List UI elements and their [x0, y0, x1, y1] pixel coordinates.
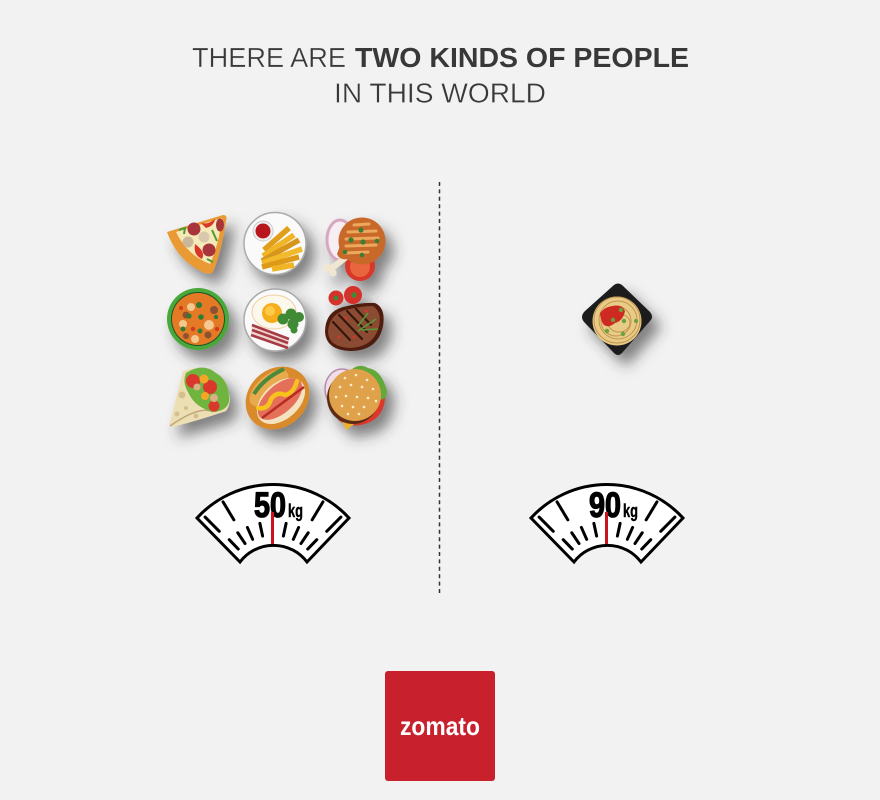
icon: steak with tomatoes	[325, 286, 384, 351]
icon: soup bowl	[167, 288, 229, 350]
title: IN THIS WORLD	[334, 78, 546, 108]
icon: grilled chicken	[323, 218, 386, 281]
gauge: 50 kg: kg	[288, 501, 303, 521]
gauge: 50 kg	[197, 485, 349, 562]
icon: fries plate	[244, 212, 306, 274]
title: THERE ARE	[192, 42, 346, 73]
icon: egg and bacon plate	[244, 289, 306, 351]
title	[192, 42, 689, 108]
title: TWO KINDS OF PEOPLE	[355, 42, 689, 73]
logo: zomato: zomato	[400, 711, 480, 741]
icon: hot dog	[233, 354, 322, 442]
dashed divider	[438, 182, 440, 596]
icon: burger	[325, 366, 387, 430]
icon: wrap	[170, 368, 230, 427]
gauge: 50 kg: 50	[254, 486, 286, 525]
gauge: 90 kg: kg	[623, 501, 638, 521]
gauge: 90 kg: 90	[589, 486, 621, 525]
gauge: 90 kg	[531, 485, 683, 562]
icon: pizza slice	[167, 215, 227, 274]
panel: single food, icon: pasta plate	[582, 284, 652, 355]
panel: many foods	[167, 212, 387, 442]
logo: zomato	[385, 671, 495, 781]
